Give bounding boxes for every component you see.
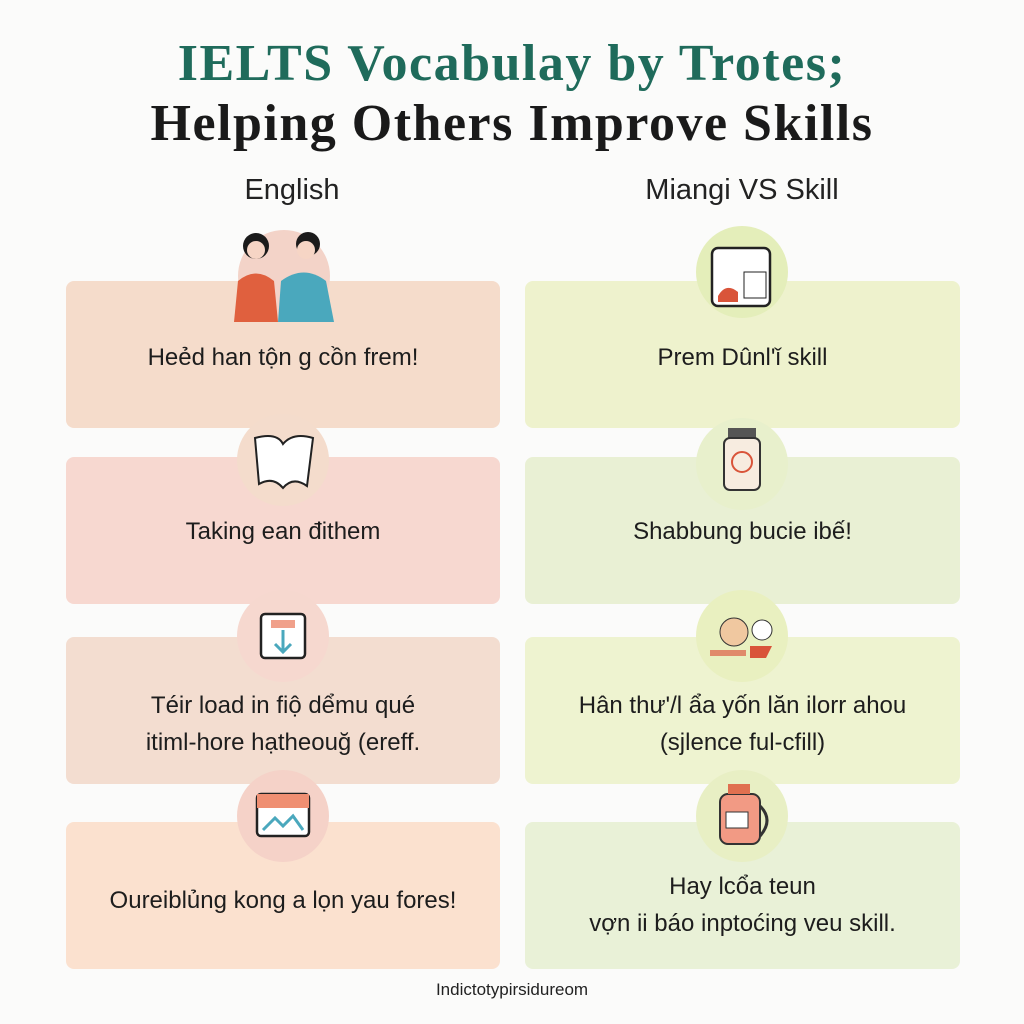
panel: right 4: vợn ii báo inptoćing veu skill. (589, 910, 896, 937)
panel: right 3: Hân thư'/l ẩa yốn lăn ilorr ahou (579, 692, 906, 719)
panel: right 3 (525, 637, 960, 784)
panel: right 1 (525, 281, 960, 428)
panel: left 4: Oureiblủng kong a lọn yau fores! (110, 887, 456, 914)
panel: right 3: (sjlence ful-cfill) (660, 729, 825, 756)
panel: left 1: Heẻd han tộn g cồn frem! (148, 344, 418, 371)
title: IELTS Vocabulay by Trotes; (178, 35, 846, 92)
icon: people (234, 230, 334, 322)
panel: left 4 (66, 822, 500, 969)
icon: jar (696, 428, 788, 491)
panel: right 1: Prem Dûnl'ǐ skill (658, 344, 827, 371)
panel: left 3: Téir load in fiộ dểmu qué (151, 692, 415, 719)
heading: Miangi VS Skill: Miangi VS Skill (645, 174, 839, 206)
icon: drawing board (696, 226, 788, 318)
panel: left 2: Taking ean đithem (186, 518, 380, 545)
panel: left 1 (66, 281, 500, 428)
panel: right 2: Shabbung bucie ibế! (633, 518, 852, 545)
panel: left 2 (66, 457, 500, 604)
panel: left 3 (66, 637, 500, 784)
icon: kettle (696, 770, 788, 862)
panel: right 4 (525, 822, 960, 969)
footer: Indictotypirsidureom (436, 980, 588, 999)
panel: left 3: itiml-hore hạtheouğ (ereff. (146, 729, 420, 756)
heading: English: English (244, 174, 340, 206)
title (151, 35, 873, 152)
icon: monitor (237, 770, 329, 862)
icon: tablet (237, 604, 329, 660)
title: Helping Others Improve Skills (151, 95, 873, 152)
panel: right 4: Hay lcổa teun (669, 873, 816, 900)
icon: tools (696, 590, 788, 682)
icon: book (237, 428, 329, 490)
panel: right 2 (525, 457, 960, 604)
